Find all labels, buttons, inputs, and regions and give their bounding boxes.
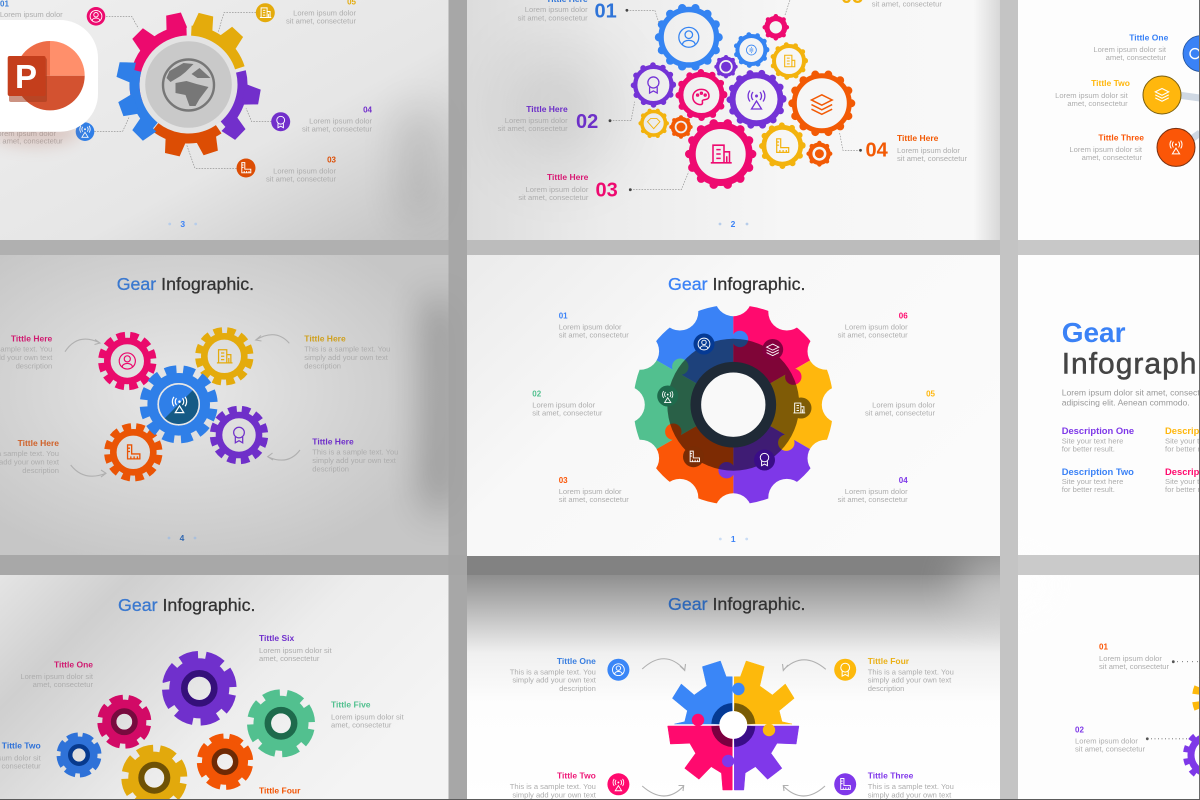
labels: sit amet, consectetur: [897, 154, 968, 163]
labels: sit amet, consectetur: [865, 409, 935, 418]
labels: This is a sample text. You: [868, 667, 954, 676]
labels: This is a sample text. You: [312, 448, 398, 457]
pagination: [168, 533, 196, 543]
pagination: 3: [180, 219, 185, 229]
icon circles: [1143, 36, 1200, 166]
labels: sit amet, consectetur: [838, 495, 908, 504]
partial gears: [1183, 667, 1200, 782]
labels: sit amet, consectetur: [302, 125, 372, 134]
labels: Tittle Here: [897, 133, 939, 143]
gear: four puzzle pieces: [668, 661, 799, 790]
labels: This is a sample text. You: [510, 782, 596, 791]
connector lines: [609, 0, 862, 191]
labels: Tittle Here: [304, 334, 346, 344]
labels: Lorem ipsum dolor sit: [331, 713, 404, 722]
labels: [532, 312, 936, 504]
labels: Tittle Four: [259, 785, 301, 795]
labels: [0, 334, 398, 475]
panel: slide 5, six loose gears: [0, 595, 404, 800]
labels: [0, 633, 404, 795]
panel: slide 1, six colour puzzle gear: [532, 274, 936, 544]
descriptions: Site your text here: [1062, 436, 1123, 445]
labels: Lorem ipsum dolor: [872, 401, 935, 410]
descriptions: [1062, 425, 1200, 494]
labels: Lorem ipsum dolor: [559, 322, 622, 331]
labels: 02: [576, 111, 598, 133]
labels: amet, consectetur: [1082, 153, 1142, 162]
labels: sit amet, consectetur: [266, 174, 336, 183]
labels: sit amet, consectetur: [498, 124, 568, 133]
labels: Lorem ipsum dolor: [845, 322, 908, 331]
labels: Tittle Here: [526, 104, 568, 114]
labels: Tittle Five: [331, 700, 371, 710]
labels: 06: [899, 312, 908, 321]
panel: slide 2, cluster of gears: [498, 0, 968, 229]
labels: Lorem ipsum dolor: [273, 166, 336, 175]
labels: description: [22, 466, 59, 475]
labels: Lorem ipsum dolor sit: [259, 646, 332, 655]
heading: [1062, 317, 1200, 380]
labels: 04: [866, 140, 889, 162]
panel: slide 3, five segment gear around globe: [0, 0, 373, 229]
labels: [510, 656, 954, 799]
pagination: [719, 219, 748, 229]
labels: simply add your own text: [868, 790, 952, 799]
labels: simply add your own text: [868, 676, 952, 685]
labels: Tittle Here: [312, 436, 354, 446]
icon: PowerPoint app badge: [0, 20, 98, 146]
labels: 02: [532, 390, 542, 399]
descriptions: Site your text here: [1062, 477, 1123, 486]
labels: 01: [559, 312, 568, 321]
labels: Tittle Four: [868, 656, 910, 666]
panel: top right slide, circles with titles: [1055, 32, 1200, 166]
panel: slide 6, four piece puzzle gear: [510, 594, 954, 799]
labels: simply add your own text: [312, 456, 397, 465]
panel: slide 4, five meshed gears: [0, 274, 398, 543]
labels: Tittle Here: [547, 172, 589, 182]
gears: [98, 327, 268, 481]
labels: [498, 0, 968, 202]
labels: Lorem ipsum dolor: [0, 10, 63, 19]
heading: Gear Infographic.: [118, 595, 255, 615]
labels: amet, consectetur: [1067, 99, 1128, 108]
labels: sit amet, consectetur: [1075, 744, 1146, 754]
labels: Tittle Here: [11, 334, 53, 344]
arrows: [65, 335, 300, 477]
labels: sit amet, consectetur: [532, 409, 603, 418]
panel: middle right slide, cover text: [1062, 317, 1200, 494]
labels: [1055, 32, 1169, 162]
labels: Tittle Six: [259, 633, 295, 643]
labels: Lorem ipsum dolor sit: [1093, 45, 1167, 54]
dotted connectors: [1146, 660, 1200, 740]
labels: amet, consectetur: [259, 654, 320, 663]
labels: 01: [1099, 642, 1108, 652]
connector lines: [94, 13, 272, 168]
labels: description: [559, 684, 596, 693]
labels: Tittle One: [54, 659, 93, 669]
labels: simply add your own text: [512, 790, 597, 799]
labels: sit amet, consectetur: [518, 14, 588, 23]
labels: Tittle One: [557, 656, 596, 666]
heading: Gear Infographic.: [668, 274, 805, 294]
labels: 03: [327, 155, 337, 164]
labels: 04: [899, 476, 908, 485]
gear: six sectors: [665, 331, 802, 478]
labels: description: [312, 464, 349, 473]
gear icons: [119, 350, 244, 459]
heading: Gear: [1062, 317, 1126, 348]
labels: Lorem ipsum dolor: [559, 487, 622, 496]
labels: amet, consectetur: [1106, 53, 1166, 62]
labels: Lorem ipsum dolor: [1099, 654, 1162, 663]
labels: Lorem ipsum dolor sit: [1069, 145, 1143, 154]
gear icons: [657, 334, 812, 470]
labels: Tittle Three: [868, 771, 914, 781]
gears: [55, 649, 316, 800]
heading: Gear Infographic.: [117, 274, 254, 294]
labels: sit amet, consectetur: [838, 330, 908, 339]
icon: globe: [163, 60, 214, 110]
labels: Lorem ipsum dolor: [845, 487, 908, 496]
labels: sit amet, consectetur: [286, 16, 356, 25]
gear icons: [647, 27, 832, 163]
labels: 01: [594, 0, 617, 22]
labels: amet, consectetur: [33, 680, 93, 689]
labels: sit amet, consectetur: [1099, 662, 1170, 671]
heading: Gear Infographic.: [668, 594, 805, 614]
pagination: [719, 534, 748, 544]
labels: Lorem ipsum dolor: [309, 117, 372, 126]
labels: Lorem ipsum dolor: [293, 8, 356, 17]
labels: Tittle Three: [1098, 132, 1144, 142]
labels: Tittle Two: [1091, 78, 1130, 88]
labels: [0, 0, 373, 183]
labels: description: [304, 361, 341, 370]
labels: This is a sample text. You: [868, 782, 954, 791]
icon circles: [607, 659, 856, 795]
labels: 02: [1075, 726, 1084, 735]
labels: Lorem ipsum dolor: [1075, 736, 1138, 745]
connector bands: [1178, 95, 1200, 140]
descriptions: Description Two: [1062, 466, 1134, 477]
labels: sit amet, consectetur: [559, 495, 629, 504]
arrows: [642, 659, 826, 796]
descriptions: for better result.: [1062, 485, 1115, 494]
labels: 03: [559, 476, 568, 485]
descriptions: Description One: [1062, 425, 1134, 436]
labels: sit amet, consectetur: [518, 193, 589, 202]
labels: Lorem ipsum dolor: [532, 401, 596, 410]
labels: Lorem ipsum dolor sit: [1055, 91, 1129, 100]
pagination: 4: [180, 533, 185, 543]
labels: Tittle Two: [2, 740, 41, 750]
labels: Lorem ipsum dolor: [525, 5, 588, 14]
labels: 04: [363, 106, 373, 115]
intro text: [1062, 387, 1200, 408]
labels: description: [16, 361, 52, 370]
labels: Lorem ipsum dolor: [526, 185, 589, 194]
gear: segmented ring and teeth: [113, 9, 264, 160]
labels: Tittle One: [1129, 32, 1169, 42]
gear cluster: [634, 8, 851, 185]
pagination: 1: [731, 534, 736, 544]
icon: PowerPoint app badge: P: [15, 58, 37, 95]
labels: Tittle Two: [557, 771, 596, 781]
labels: Lorem ipsum dolor sit: [20, 672, 94, 681]
pagination: [168, 219, 197, 229]
pagination: 2: [731, 219, 736, 229]
intro text: adipiscing elit. Aenean commodo.: [1062, 398, 1190, 408]
labels: 03: [596, 180, 618, 202]
labels: sit amet, consectetur: [559, 330, 629, 339]
panel: bottom right slide, numbered items: [1075, 642, 1200, 782]
labels: amet, consectetur: [331, 721, 392, 730]
labels: Lorem ipsum dolor: [505, 116, 568, 125]
descriptions: for better result.: [1062, 444, 1115, 454]
labels: simply add your own text: [512, 676, 597, 685]
labels: description: [868, 684, 904, 693]
labels: 05: [926, 390, 936, 399]
labels: This is a sample text. You: [510, 667, 596, 676]
labels: This is a sample text. You: [304, 345, 390, 354]
labels: Lorem ipsum dolor: [897, 146, 960, 155]
icon circles: [76, 3, 290, 178]
labels: Tittle Here: [18, 438, 59, 448]
labels: simply add your own text: [304, 353, 389, 362]
labels: [1075, 642, 1170, 754]
